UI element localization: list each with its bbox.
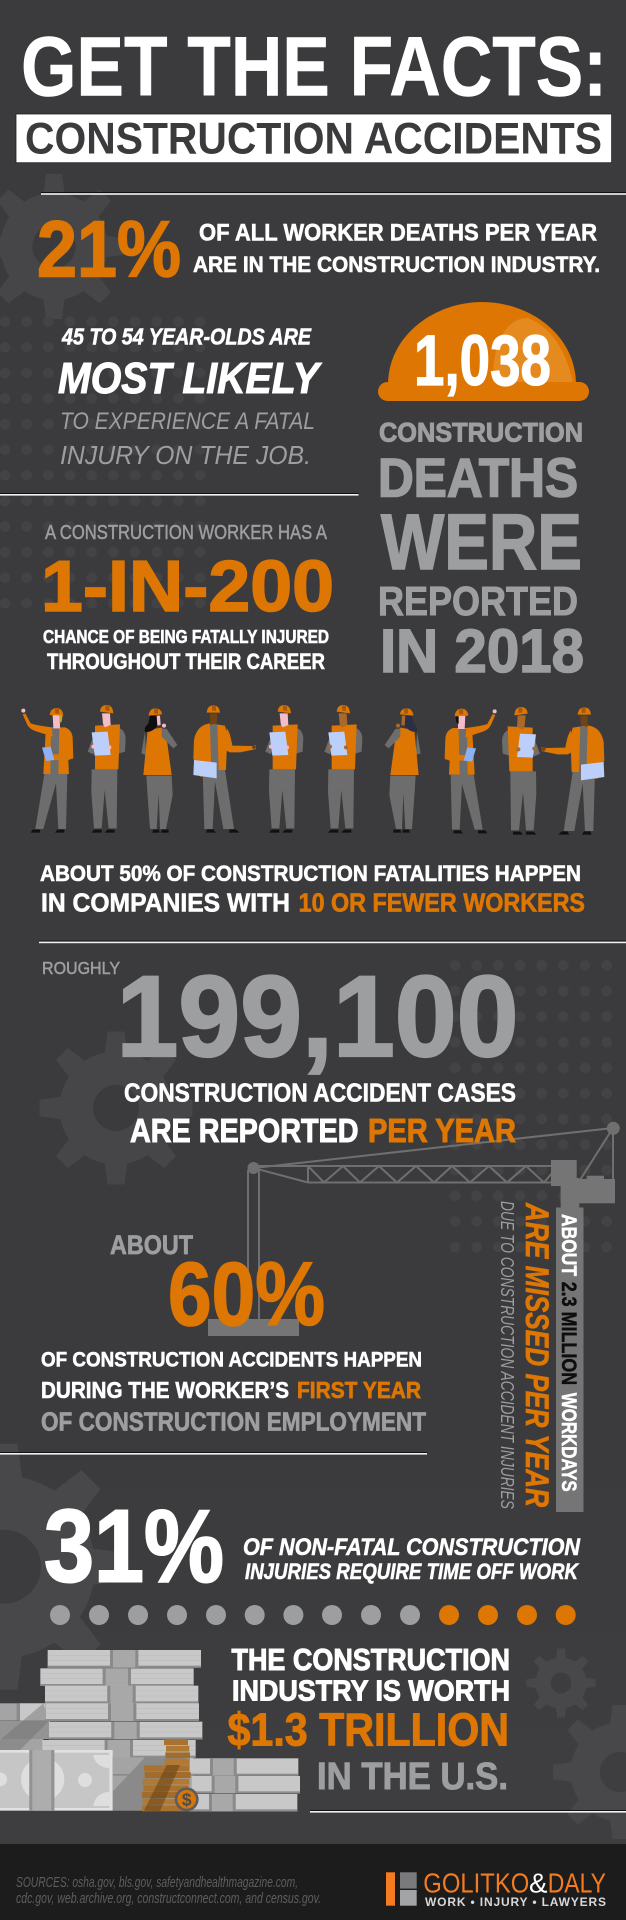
big number 199,100: 199,100	[116, 953, 518, 1081]
worker 8	[445, 709, 497, 833]
stat: most likely age group: INJURY ON THE JOB.	[60, 440, 311, 470]
worker 3	[141, 708, 177, 833]
worker 2	[88, 705, 126, 833]
footer	[0, 1844, 626, 1920]
footer: cdc.gov, web.archive.org, constructconnect.com, and census.gov.	[16, 1891, 321, 1907]
worker 6	[324, 705, 362, 833]
stat: 21 percent of worker deaths	[37, 205, 600, 294]
illustration: stacks of money and coins	[0, 1650, 300, 1811]
stat: industry worth 1.3 trillion: THE CONSTRUCTION	[232, 1643, 510, 1677]
stat: about 60 percent first-year accidents	[41, 1230, 426, 1437]
stat: 1-in-200: CHANCE OF BEING FATALLY INJURED	[43, 627, 329, 647]
stat: industry worth 1.3 trillion: IN THE U.S.	[317, 1756, 508, 1798]
center stack of bundles	[40, 1650, 202, 1758]
stat: roughly 199,100 cases	[42, 953, 518, 1150]
big number 1-in-200: 1-IN-200	[41, 546, 334, 627]
vertical stat: 2.3 million workdays	[497, 1201, 581, 1509]
stat: 1-in-200	[41, 522, 334, 674]
stat: 31 percent require time off	[44, 1489, 581, 1604]
orange highlight: PER YEAR	[368, 1113, 516, 1150]
stat: deaths reported in 2018: CONSTRUCTION	[379, 418, 583, 448]
stat: 1-in-200: A CONSTRUCTION WORKER HAS A	[45, 522, 328, 544]
dollar coin	[175, 1787, 199, 1811]
description: OF ALL WORKER DEATHS PER YEAR	[199, 220, 597, 247]
stat: 21 percent of worker deaths: ARE IN THE CONSTRUCTION INDUSTRY.	[193, 252, 600, 277]
stat: 50 percent in small companies: IN COMPANIES WITH	[41, 888, 290, 918]
vertical stat: 2.3 million workdays: 2.3 MILLION	[557, 1282, 581, 1385]
lead line: 45 TO 54 YEAR-OLDS ARE	[61, 324, 312, 350]
big number 1.3 trillion: $1.3 TRILLION	[228, 1704, 509, 1756]
crane lines	[248, 1128, 613, 1320]
right stack of bundles	[189, 1758, 300, 1811]
stat: industry worth 1.3 trillion: INDUSTRY IS WORTH	[232, 1676, 510, 1708]
logo: DALY	[548, 1868, 606, 1899]
orange rotated text: ARE MISSED PER YEAR	[519, 1202, 555, 1507]
stat: deaths reported in 2018: REPORTED	[378, 578, 578, 624]
big number 31%: 31%	[44, 1489, 224, 1604]
stat: deaths reported in 2018	[378, 418, 584, 685]
icon: large gear bottom left	[0, 1444, 127, 1690]
stat: deaths reported in 2018: DEATHS	[378, 448, 578, 509]
logo: WORK • INJURY • LAWYERS	[425, 1895, 606, 1909]
dot chart: 14 dots with 4 orange	[50, 1605, 576, 1625]
stat: about 60 percent first-year accidents: OF CONSTRUCTION ACCIDENTS HAPPEN	[41, 1348, 422, 1372]
icon: gear top left	[0, 174, 127, 319]
front banknote bundle	[0, 1750, 113, 1811]
stat: 50 percent in small companies: ABOUT 50% OF CONSTRUCTION FATALITIES HAPPEN	[40, 861, 581, 886]
lower middle stack	[113, 1757, 193, 1811]
workers 1 to 5	[21, 705, 303, 833]
icon: medium gear bottom right	[553, 1705, 626, 1839]
vertical stat: 2.3 million workdays: ABOUT	[557, 1214, 581, 1276]
subtitle banner	[16, 114, 612, 163]
dollar coin: $	[182, 1790, 192, 1810]
big number 60%: 60%	[168, 1245, 325, 1345]
stat: 31 percent require time off: OF NON-FATAL CONSTRUCTION	[243, 1534, 581, 1561]
sources: SOURCES: osha.gov, bls.gov, safetyandhealthmagazine.com,	[16, 1875, 298, 1891]
emphasis: MOST LIKELY	[58, 355, 323, 403]
orange highlight: 10 OR FEWER WORKERS	[299, 888, 585, 918]
worker 10	[542, 707, 604, 835]
stat: about 60 percent first-year accidents: DURING THE WORKER’S	[41, 1377, 289, 1403]
stat: roughly 199,100 cases: CONSTRUCTION ACCIDENT CASES	[124, 1078, 516, 1108]
workers 6 to 10	[324, 705, 604, 835]
stat: 1-in-200: THROUGHOUT THEIR CAREER	[47, 649, 325, 674]
worker 1	[21, 708, 73, 833]
stat: 50 percent in small companies	[40, 861, 585, 918]
vertical stat: 2.3 million workdays: WORKDAYS	[557, 1393, 581, 1492]
big number 21%: 21%	[37, 205, 181, 294]
stat: 31 percent require time off: INJURIES REQUIRE TIME OFF WORK	[245, 1559, 580, 1584]
worker 9	[502, 707, 540, 835]
orange highlight: FIRST YEAR	[297, 1377, 421, 1403]
gray rotated text: DUE TO CONSTRUCTION ACCIDENT INJURIES	[497, 1201, 518, 1509]
stat: roughly 199,100 cases: ROUGHLY	[42, 958, 120, 978]
worker 4	[193, 705, 256, 833]
stat: most likely age group	[58, 324, 323, 470]
icon: gear middle left	[40, 1032, 193, 1184]
worker 5	[265, 705, 303, 833]
stat: about 60 percent first-year accidents: ABOUT	[110, 1230, 193, 1260]
icon: small gear bottom right	[526, 1648, 596, 1718]
coin stacks	[142, 1739, 191, 1811]
logo	[386, 1868, 606, 1909]
stat: deaths reported in 2018: WERE	[381, 498, 582, 586]
stat: industry worth 1.3 trillion	[228, 1643, 510, 1798]
illustration: row of ten construction workers	[21, 705, 604, 835]
worker 7	[385, 708, 421, 833]
stat: roughly 199,100 cases: ARE REPORTED	[130, 1113, 358, 1150]
logo: &	[529, 1868, 548, 1899]
logo: GOLITKO	[423, 1868, 529, 1899]
stat: about 60 percent first-year accidents: OF CONSTRUCTION EMPLOYMENT	[41, 1409, 426, 1437]
icon: hard hat with 1,038	[378, 302, 589, 401]
hard hat number: 1,038	[414, 322, 551, 401]
illustration: tower crane	[208, 1122, 620, 1512]
left rear stack	[0, 1703, 50, 1751]
stat: deaths reported in 2018: IN 2018	[380, 617, 584, 685]
follow-up text: TO EXPERIENCE A FATAL	[60, 408, 315, 435]
